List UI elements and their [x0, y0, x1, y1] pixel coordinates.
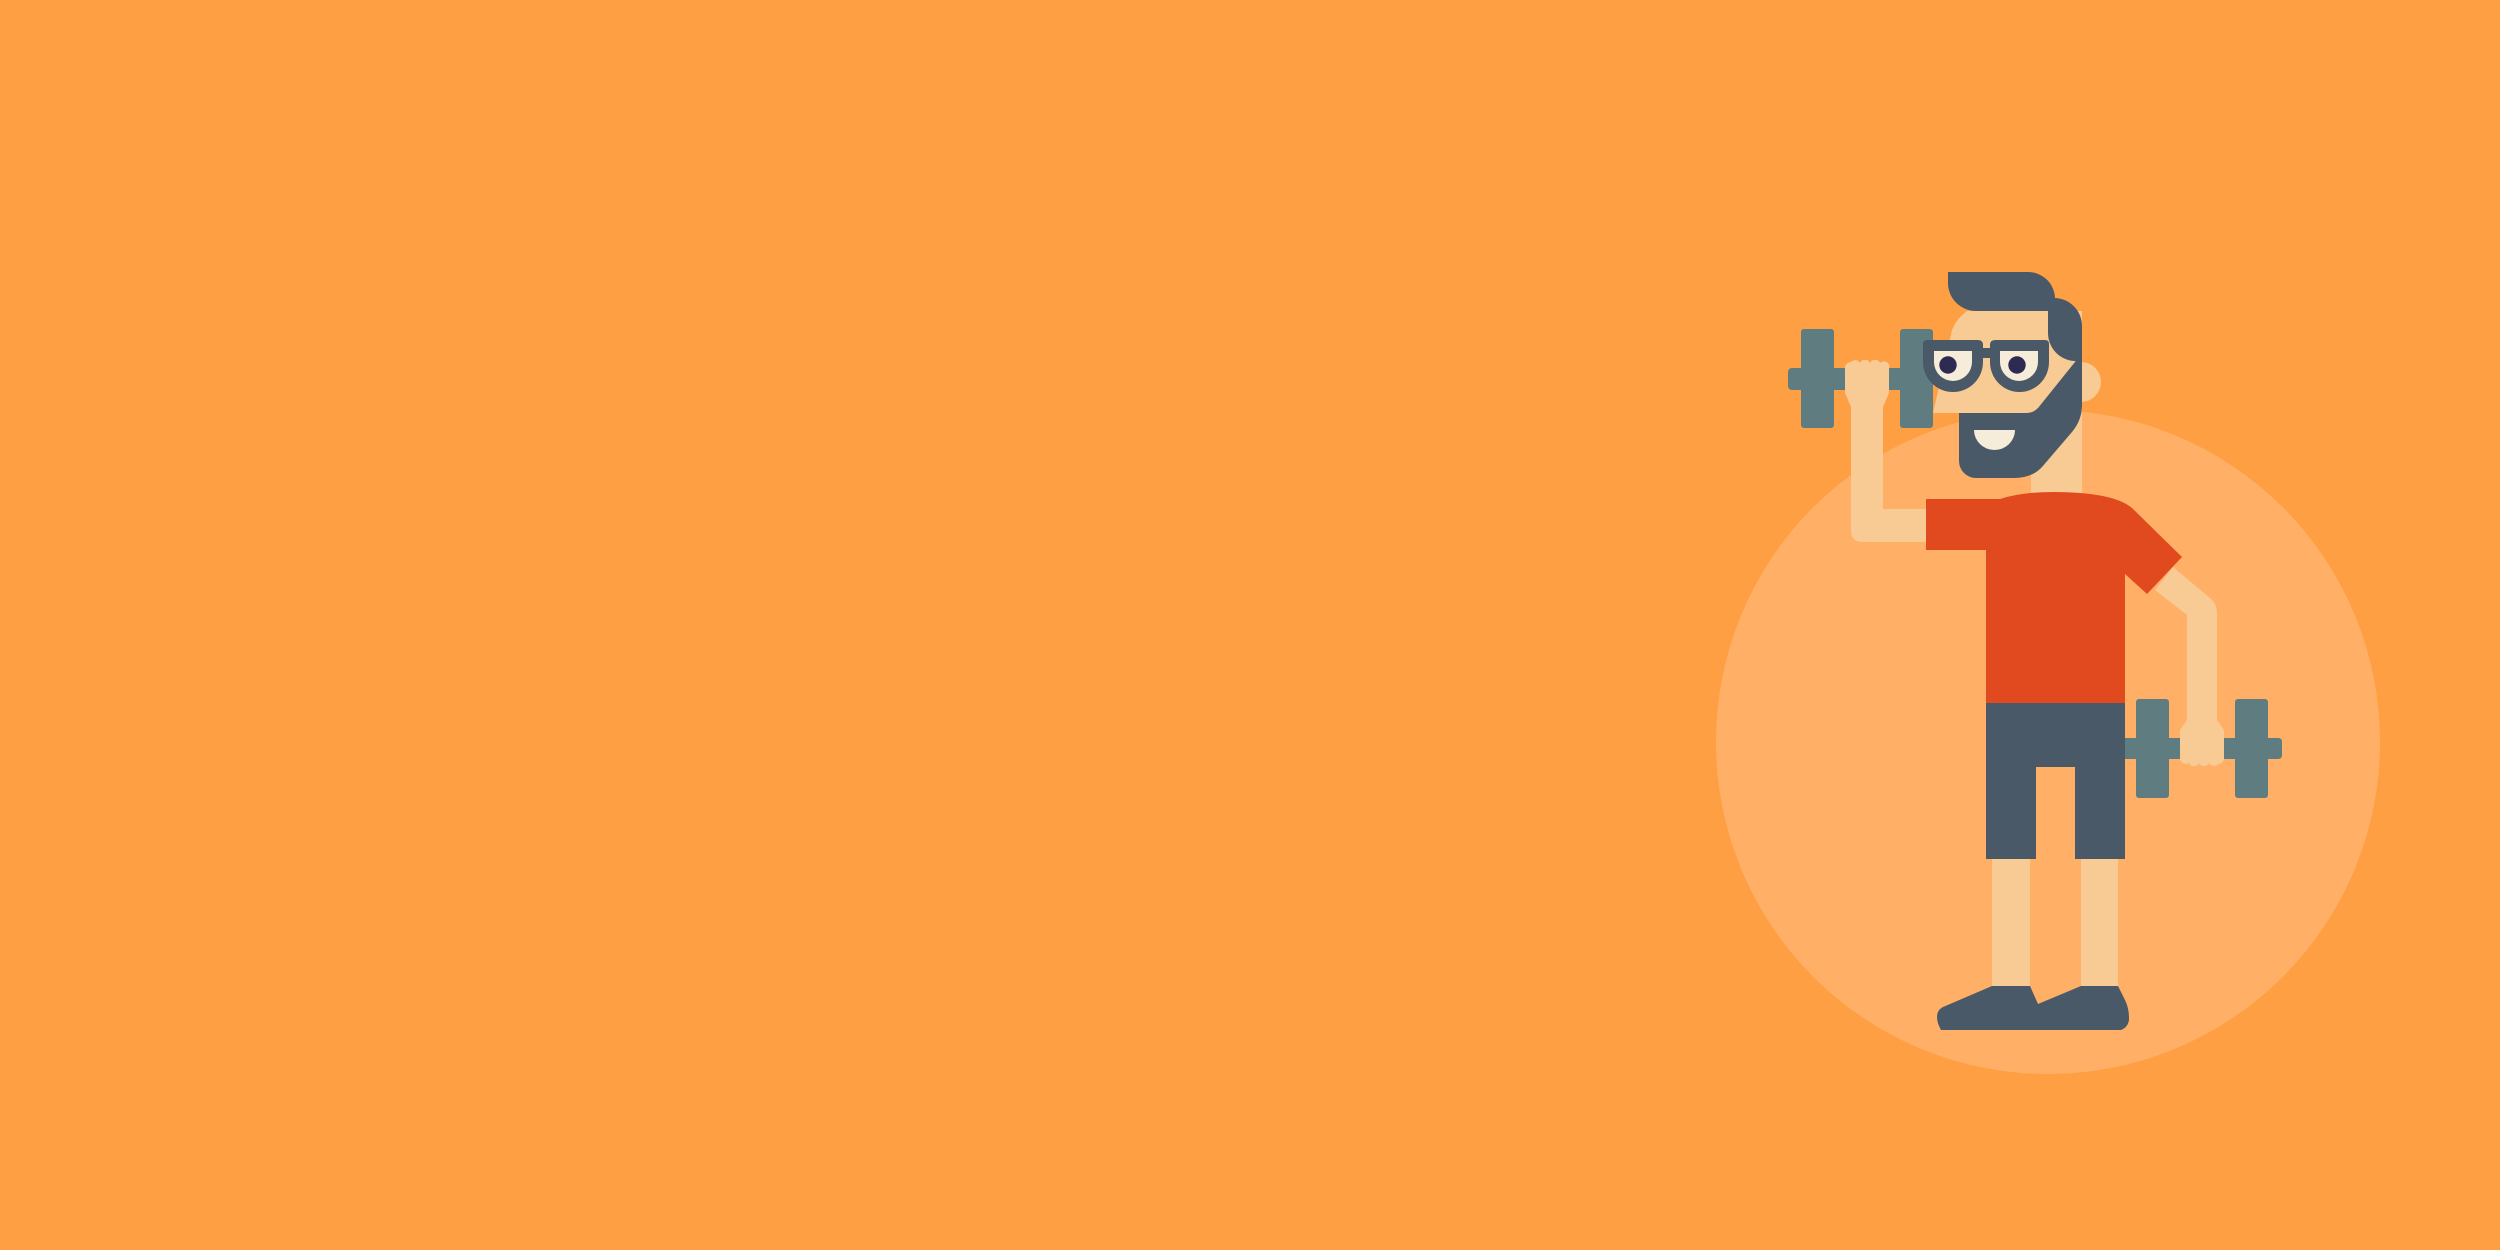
beard	[1959, 356, 2082, 478]
raised hand	[1845, 360, 1889, 407]
mouth	[1974, 430, 2015, 450]
lowered arm	[2155, 567, 2217, 730]
neck	[2031, 400, 2082, 500]
raised arm	[1851, 395, 1930, 542]
shoes	[1937, 986, 2129, 1030]
lowered hand	[2180, 720, 2224, 766]
glasses	[1923, 340, 2049, 392]
ear	[2061, 362, 2101, 402]
dumbbell: raised	[1788, 329, 1933, 428]
dumbbell: lowered	[2125, 699, 2282, 798]
legs	[1992, 855, 2118, 990]
hair: top	[1948, 272, 2055, 311]
backdrop circle	[1716, 410, 2380, 1074]
shirt	[1926, 492, 2182, 703]
shorts	[1986, 703, 2125, 859]
face	[1933, 311, 2082, 413]
hair: side	[2048, 298, 2082, 372]
